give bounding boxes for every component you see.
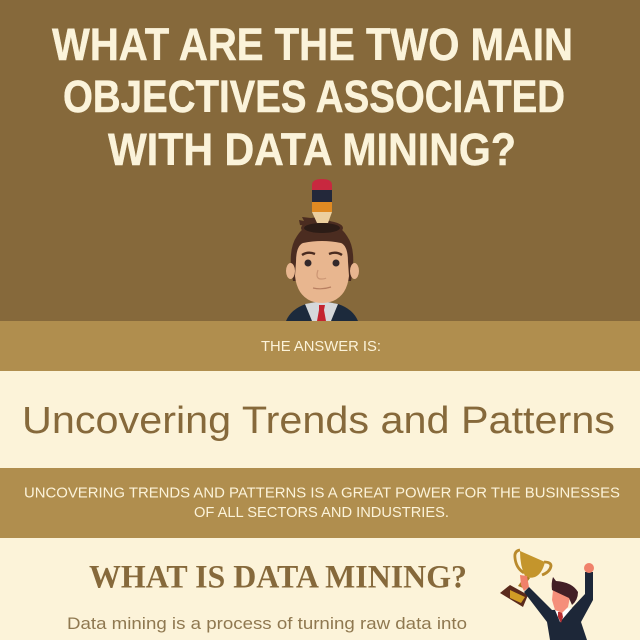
answer heading: Uncovering Trends and Patterns <box>22 400 615 442</box>
shirt <box>555 608 572 622</box>
title <box>52 19 573 175</box>
tie <box>317 305 326 321</box>
eyes <box>304 260 312 266</box>
section heading: WHAT IS DATA MINING? <box>89 560 467 596</box>
panel: title header <box>0 0 640 321</box>
hand holding trophy <box>520 575 529 591</box>
panel: explanation band <box>0 468 640 538</box>
panel: the answer band <box>0 321 640 371</box>
icon: businessman with trophy <box>500 550 594 640</box>
ears <box>286 263 295 279</box>
fist <box>584 563 594 573</box>
panel: what is data mining <box>0 538 640 640</box>
face <box>295 241 349 303</box>
collar <box>305 301 338 321</box>
answer label: THE ANSWER IS: <box>261 338 381 355</box>
suit and raised arms <box>524 572 593 640</box>
eyebrows <box>302 253 315 255</box>
tie <box>558 612 563 623</box>
body text: Data mining is a process of turning raw data into <box>67 614 467 633</box>
explanation text: UNCOVERING TRENDS AND PATTERNS IS A GREAT POWER FOR THE BUSINESSES <box>24 484 620 502</box>
pencil <box>312 179 332 223</box>
title: WHAT ARE THE TWO MAIN <box>52 19 573 70</box>
title: OBJECTIVES ASSOCIATED <box>63 71 565 122</box>
trophy <box>500 550 551 607</box>
head opening <box>301 220 343 236</box>
explanation text: OF ALL SECTORS AND INDUSTRIES. <box>194 504 449 521</box>
hair <box>552 577 578 605</box>
nose and mouth <box>317 270 326 279</box>
icon: man with pencil in head <box>286 179 359 321</box>
suit <box>286 301 358 321</box>
title: WITH DATA MINING? <box>108 124 516 175</box>
face <box>552 590 570 613</box>
explanation text <box>24 484 620 521</box>
panel: headline answer <box>0 371 640 468</box>
hair <box>291 223 353 281</box>
body text <box>67 614 467 640</box>
